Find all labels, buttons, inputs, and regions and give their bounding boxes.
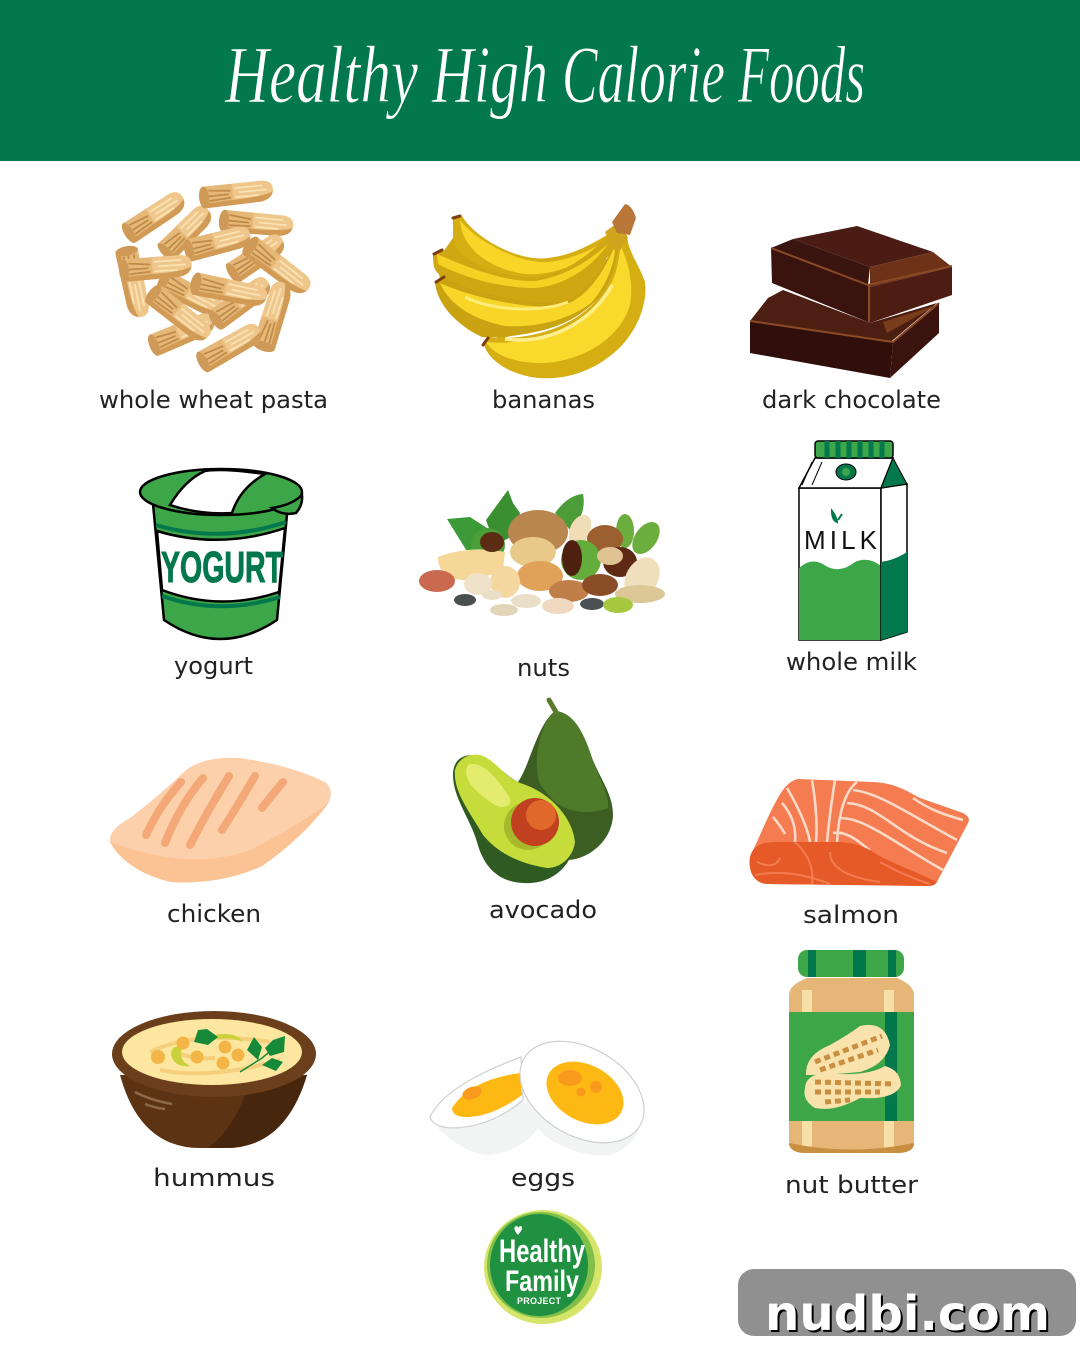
food item: hummus	[112, 1011, 316, 1192]
milk wordmark: MILK	[804, 525, 878, 555]
label: dark chocolate	[762, 386, 941, 414]
watermark	[738, 1269, 1076, 1342]
icon: milk carton	[799, 441, 907, 640]
label: avocado	[489, 896, 597, 924]
icon: grilled chicken	[110, 758, 331, 882]
food item: nut butter	[785, 950, 918, 1199]
label: chicken	[167, 900, 261, 928]
food item: eggs	[430, 1020, 662, 1192]
label: eggs	[511, 1164, 575, 1192]
food item: yogurt	[140, 469, 302, 680]
label: nut butter	[785, 1171, 918, 1199]
food item: chicken	[110, 758, 331, 928]
title: Calorie	[562, 29, 725, 120]
label: hummus	[153, 1164, 275, 1192]
food item: avocado	[453, 700, 613, 924]
yogurt wordmark: YOGURT	[161, 543, 283, 592]
header banner	[0, 0, 1080, 161]
food item: bananas	[433, 204, 646, 414]
icon: yogurt cup	[140, 469, 302, 639]
food item: whole wheat pasta	[99, 180, 328, 414]
label: whole wheat pasta	[99, 386, 328, 414]
food item: whole milk	[786, 441, 917, 676]
food item: nuts	[419, 490, 667, 682]
icon: salmon fillet	[750, 779, 969, 886]
logo: Healthy Family Project: Family	[505, 1265, 579, 1298]
logo: Healthy Family Project	[484, 1210, 602, 1324]
watermark: nudbi.com	[765, 1286, 1050, 1342]
label: yogurt	[174, 652, 253, 680]
icon: boiled eggs	[430, 1020, 662, 1164]
title	[224, 29, 865, 120]
icon: avocado	[453, 700, 613, 883]
title: Foods	[737, 29, 865, 120]
title: Healthy	[224, 29, 418, 120]
icon: nut butter jar	[789, 950, 914, 1153]
label: nuts	[517, 654, 570, 682]
icon: dark chocolate	[750, 226, 952, 378]
label: whole milk	[786, 648, 917, 676]
logo: Healthy Family Project: PROJECT	[517, 1296, 562, 1306]
icon: mixed nuts	[419, 490, 667, 616]
icon: bananas	[433, 204, 646, 378]
label: bananas	[492, 386, 595, 414]
food item: dark chocolate	[750, 226, 952, 414]
logo: Healthy Family Project: Healthy	[499, 1233, 585, 1269]
icon: hummus bowl	[112, 1011, 316, 1148]
title: High	[431, 29, 548, 120]
icon: pasta	[114, 180, 314, 374]
label: salmon	[803, 901, 899, 929]
food item: salmon	[750, 779, 969, 929]
